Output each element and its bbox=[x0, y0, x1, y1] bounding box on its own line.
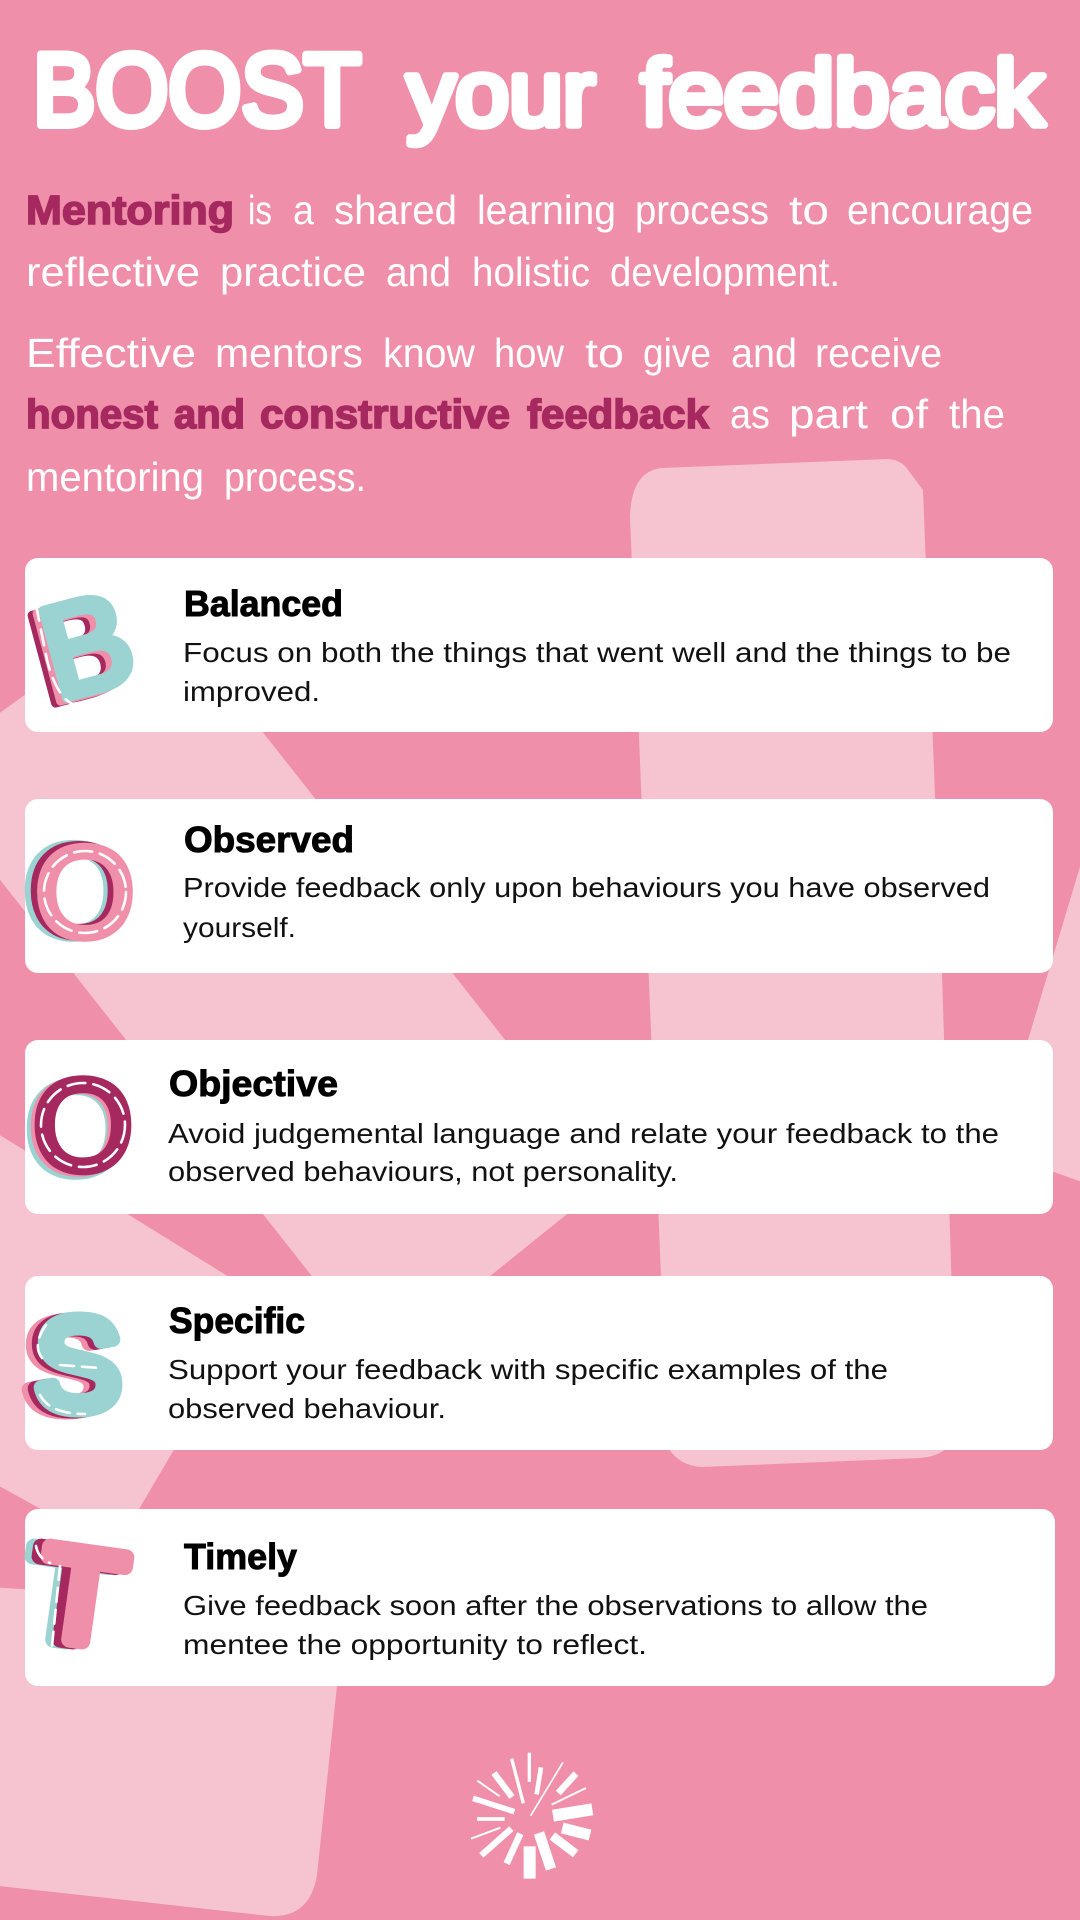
intro paragraph: effective mentors: of bbox=[890, 391, 929, 437]
intro paragraph: effective mentors bbox=[26, 330, 1005, 500]
intro paragraph: mentoring definition: Mentoring bbox=[26, 187, 234, 233]
icon: radial burst logo bbox=[471, 1753, 592, 1879]
intro paragraph: mentoring definition: development. bbox=[610, 249, 840, 295]
intro paragraph: effective mentors: give bbox=[643, 330, 711, 376]
intro paragraph: mentoring definition: process bbox=[635, 187, 769, 233]
intro paragraph: effective mentors: as bbox=[730, 391, 770, 437]
icon: letter O dark: O bbox=[28, 1053, 130, 1200]
description: Observed bbox=[183, 872, 990, 943]
intro paragraph: effective mentors: know bbox=[383, 330, 475, 376]
heading: Timely: Timely bbox=[184, 1536, 297, 1577]
icon: letter O pink: O bbox=[22, 817, 126, 966]
intro paragraph: effective mentors: to bbox=[585, 330, 624, 376]
icon: letter T: T bbox=[31, 1519, 133, 1674]
icon: letter S: S bbox=[23, 1296, 109, 1439]
description: Specific bbox=[168, 1354, 888, 1424]
intro paragraph: mentoring definition: is bbox=[248, 187, 272, 233]
icon: letter B: B bbox=[19, 566, 142, 731]
panel: Balanced bbox=[14, 558, 1053, 733]
intro paragraph: effective mentors: and bbox=[731, 330, 797, 376]
heading: Objective: Objective bbox=[169, 1063, 338, 1104]
icon: letter O pink: O bbox=[34, 819, 136, 965]
intro paragraph: effective mentors: receive bbox=[815, 330, 942, 376]
description: Objective bbox=[168, 1118, 999, 1187]
title: your bbox=[407, 41, 595, 145]
intro paragraph: effective mentors: constructive bbox=[260, 391, 510, 437]
intro paragraph: effective mentors: part bbox=[789, 391, 869, 437]
description: Observed: Provide feedback only upon behaviours you have observed bbox=[183, 872, 990, 903]
intro paragraph: effective mentors: feedback bbox=[527, 391, 709, 437]
icon: letter S: S bbox=[35, 1294, 121, 1437]
icon: letter O dark: O bbox=[32, 1052, 134, 1198]
intro paragraph: mentoring definition: a bbox=[293, 187, 314, 233]
panel: Timely bbox=[15, 1509, 1055, 1686]
icon: letter B: B bbox=[14, 568, 137, 733]
description: Objective: Avoid judgemental language and relate your feedback to the bbox=[168, 1118, 999, 1149]
heading: Observed: Observed bbox=[184, 819, 354, 860]
intro paragraph: effective mentors: honest bbox=[26, 391, 158, 437]
title: feedback bbox=[641, 41, 1045, 145]
intro paragraph: mentoring definition: shared bbox=[334, 187, 457, 233]
icon: letter B: B bbox=[25, 563, 148, 728]
intro paragraph: effective mentors: mentors bbox=[215, 330, 363, 376]
icon: letter T: T bbox=[15, 1519, 117, 1674]
intro paragraph: effective mentors: Effective bbox=[26, 330, 196, 376]
intro paragraph: mentoring definition bbox=[26, 187, 1033, 295]
intro paragraph: effective mentors: and bbox=[174, 391, 245, 437]
description: Balanced bbox=[183, 637, 1011, 707]
intro paragraph: mentoring definition: and bbox=[386, 249, 451, 295]
intro paragraph: mentoring definition: reflective bbox=[26, 249, 200, 295]
intro paragraph: mentoring definition: practice bbox=[220, 249, 366, 295]
icon: letter O dark: O bbox=[24, 1055, 128, 1204]
icon: letter O pink: O bbox=[28, 817, 130, 964]
intro paragraph: effective mentors: mentoring bbox=[26, 454, 204, 500]
heading: Specific: Specific bbox=[169, 1300, 305, 1341]
intro paragraph: effective mentors: the bbox=[949, 391, 1005, 437]
intro paragraph: mentoring definition: holistic bbox=[472, 249, 590, 295]
panel: Observed bbox=[22, 799, 1053, 973]
icon: letter S: S bbox=[29, 1295, 115, 1438]
description: Specific: observed behaviour. bbox=[168, 1393, 446, 1424]
description: Observed: yourself. bbox=[183, 912, 296, 943]
description: Balanced: improved. bbox=[183, 676, 320, 707]
description: Objective: observed behaviours, not personality. bbox=[168, 1156, 678, 1187]
intro paragraph: effective mentors: how bbox=[494, 330, 564, 376]
heading: Balanced: Balanced bbox=[184, 583, 343, 624]
description: Timely: mentee the opportunity to reflect. bbox=[183, 1629, 647, 1660]
panel: Objective bbox=[24, 1040, 1053, 1214]
intro paragraph: effective mentors: process. bbox=[224, 454, 366, 500]
description: Timely bbox=[183, 1590, 928, 1660]
description: Specific: Support your feedback with specific examples of the bbox=[168, 1354, 888, 1385]
intro paragraph: mentoring definition: learning bbox=[477, 187, 616, 233]
intro paragraph: mentoring definition: encourage bbox=[847, 187, 1033, 233]
description: Balanced: Focus on both the things that went well and the things to be bbox=[183, 637, 1011, 668]
icon: letter T: T bbox=[22, 1519, 124, 1674]
panel: Specific bbox=[23, 1276, 1053, 1450]
title bbox=[33, 33, 1045, 147]
description: Timely: Give feedback soon after the observations to allow the bbox=[183, 1590, 928, 1621]
intro paragraph: mentoring definition: to bbox=[789, 187, 829, 233]
title: BOOST bbox=[33, 33, 361, 147]
background shapes bbox=[0, 459, 1080, 1916]
